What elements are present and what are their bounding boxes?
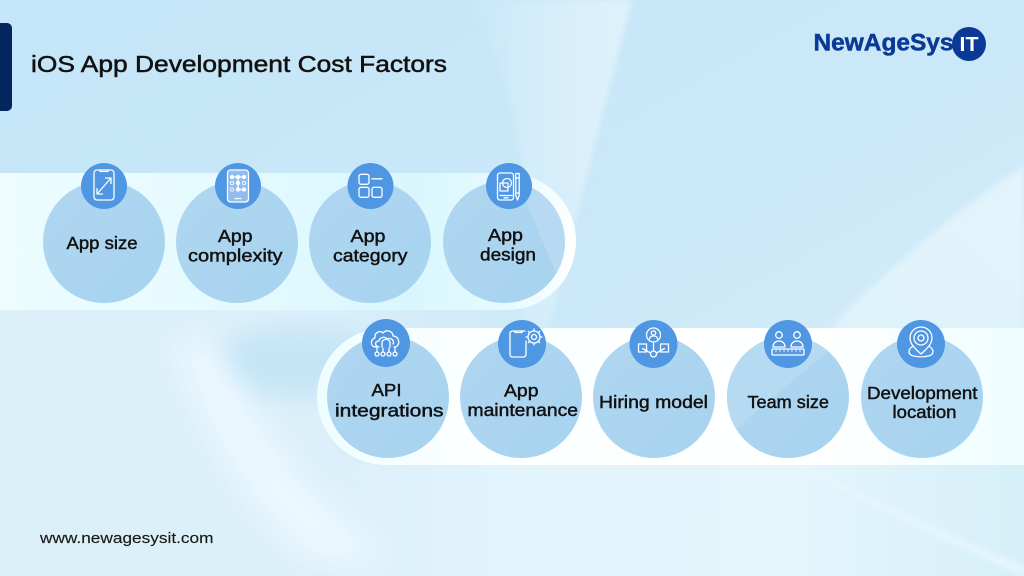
website url: www.newagesysit.com <box>39 530 214 547</box>
factor: App design: App <box>488 225 523 245</box>
factor: API integrations: API <box>372 380 402 400</box>
logo <box>814 27 986 61</box>
icon: location gear <box>897 320 945 368</box>
band: bottom row <box>317 328 1024 465</box>
factor: App complexity: App <box>218 226 252 246</box>
factor: Development location: location <box>892 402 956 422</box>
icon: design phone and pencil <box>486 163 532 209</box>
icon: hiring nodes <box>630 320 678 368</box>
factor: App size <box>43 163 165 303</box>
band: top row <box>0 173 576 310</box>
factor: Team size: Team size <box>748 392 829 412</box>
icon: pattern phone <box>215 163 261 209</box>
factor: App complexity: complexity <box>188 246 283 266</box>
factor: App category: category <box>333 246 408 266</box>
factor: App maintenance: App <box>504 380 538 400</box>
factor: App category <box>309 163 431 303</box>
accent bar <box>0 23 12 111</box>
factor: Team size <box>727 320 849 458</box>
icon: category tiles <box>348 163 394 209</box>
factor: App size: App size <box>66 233 138 253</box>
factor: App design <box>443 163 565 303</box>
factor: App maintenance <box>460 320 582 458</box>
factor: Hiring model: Hiring model <box>599 392 708 412</box>
factor: App complexity <box>176 163 298 303</box>
factor: App design: design <box>480 244 536 264</box>
logo: IT <box>960 34 978 56</box>
logo: NewAgeSys <box>814 30 954 56</box>
icon: cloud network <box>362 319 410 367</box>
factor: Hiring model <box>593 320 715 458</box>
icon: team and ruler <box>764 320 812 368</box>
factor: Development location: Development <box>867 383 978 403</box>
title: iOS App Development Cost Factors <box>31 51 447 77</box>
factor: App category: App <box>350 226 386 246</box>
factor: App maintenance: maintenance <box>468 400 578 420</box>
icon: resize phone <box>81 163 127 209</box>
factor: API integrations <box>327 319 449 458</box>
icon: phone and gear <box>498 320 546 368</box>
factor: Development location <box>861 320 983 458</box>
factor: API integrations: integrations <box>335 400 444 420</box>
